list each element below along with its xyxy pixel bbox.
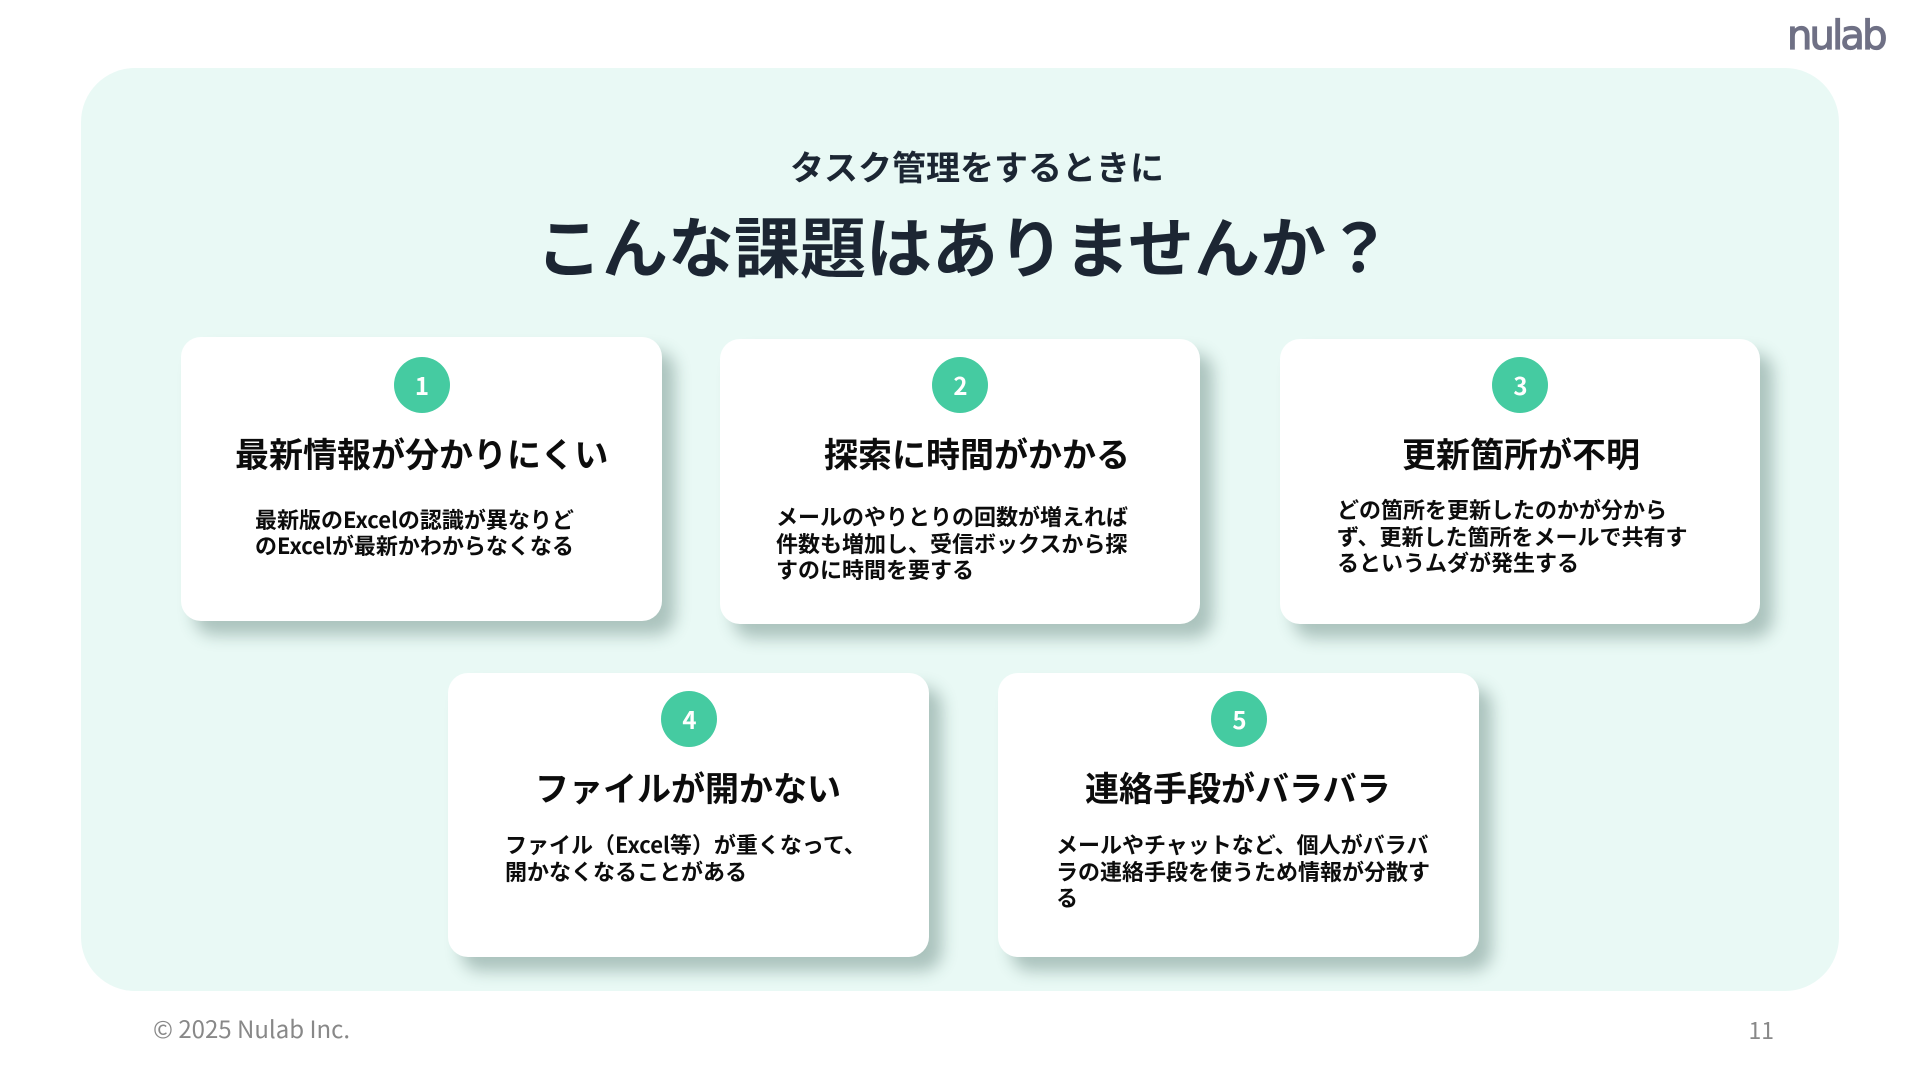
heading 1: 最新情報が分かりにくい bbox=[235, 428, 608, 477]
body 5: ラの連絡手段を使うため情報が分散す bbox=[1056, 854, 1430, 886]
number badge 3: 3 bbox=[1513, 367, 1528, 402]
number badge 5 bbox=[1211, 691, 1267, 747]
number badge 4: 4 bbox=[682, 701, 697, 736]
body 4: ファイル（Excel等）が重くなって、 bbox=[505, 828, 866, 860]
body 2: 件数も増加し、受信ボックスから探 bbox=[776, 526, 1127, 558]
card 3 bbox=[1280, 339, 1760, 624]
number badge 4 bbox=[661, 691, 717, 747]
body 1: 最新版のExcelの認識が異なりど bbox=[255, 502, 574, 534]
body 2: すのに時間を要する bbox=[776, 553, 974, 585]
number badge 1 bbox=[394, 357, 450, 413]
card 5 bbox=[998, 673, 1479, 957]
card 4 bbox=[448, 673, 929, 957]
body 1 bbox=[255, 502, 574, 561]
body 2: メールのやりとりの回数が増えれば bbox=[776, 500, 1128, 532]
number badge 5: 5 bbox=[1232, 701, 1247, 736]
body 1: のExcelが最新かわからなくなる bbox=[255, 529, 574, 561]
heading 4: ファイルが開かない bbox=[535, 762, 841, 811]
heading 5: 連絡手段がバラバラ bbox=[1085, 762, 1391, 811]
body 3: るというムダが発生する bbox=[1337, 546, 1579, 578]
body 5: る bbox=[1056, 881, 1078, 913]
panel: background bbox=[81, 68, 1839, 991]
body 3: ず、更新した箇所をメールで共有す bbox=[1337, 520, 1687, 552]
body 4 bbox=[505, 828, 866, 886]
number badge 2: 2 bbox=[953, 367, 968, 402]
body 5 bbox=[1056, 828, 1430, 913]
title: こんな課題はありませんか？ bbox=[536, 196, 1392, 292]
number badge 1: 1 bbox=[415, 367, 429, 402]
card 1 bbox=[181, 337, 662, 621]
number badge 3 bbox=[1492, 357, 1548, 413]
body 3 bbox=[1337, 493, 1687, 578]
card 2 bbox=[720, 339, 1200, 624]
page number: 11 bbox=[1748, 1012, 1774, 1046]
body 4: 開かなくなることがある bbox=[505, 854, 747, 886]
subtitle: タスク管理をするときに bbox=[790, 141, 1164, 190]
heading 2: 探索に時間がかかる bbox=[824, 428, 1130, 477]
body 5: メールやチャットなど、個人がバラバ bbox=[1056, 828, 1428, 860]
body 2 bbox=[776, 500, 1128, 585]
number badge 2 bbox=[932, 357, 988, 413]
footer copyright: © 2025 Nulab Inc. bbox=[153, 1010, 350, 1045]
heading 3: 更新箇所が不明 bbox=[1402, 428, 1640, 477]
body 3: どの箇所を更新したのかが分から bbox=[1337, 493, 1667, 525]
logo: nulab: nulab bbox=[1787, 13, 1885, 59]
